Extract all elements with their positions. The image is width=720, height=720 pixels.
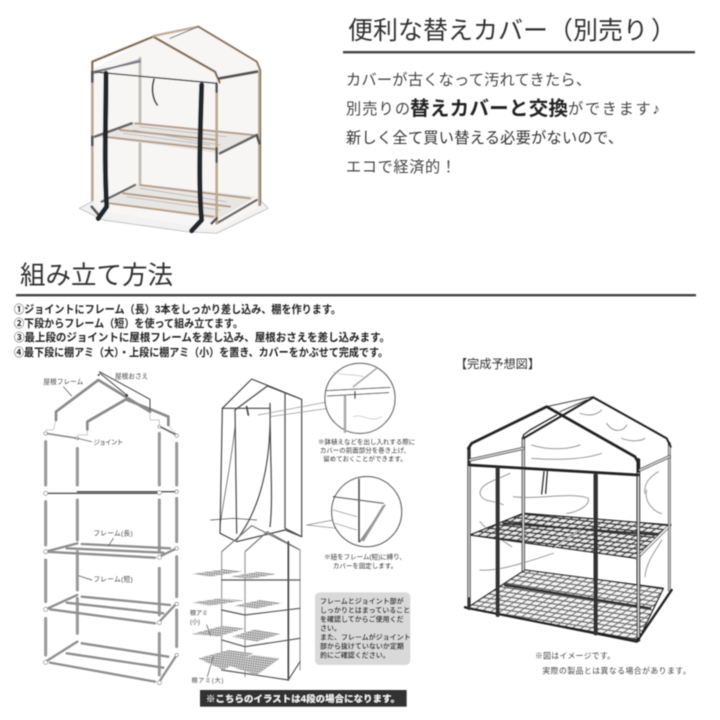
banner: four-tier note: ※こちらのイラストは4段の場合になります。	[206, 693, 400, 704]
rope	[542, 472, 547, 494]
front and side posts	[92, 70, 259, 223]
callout: check joints: さい。	[320, 623, 341, 632]
roof frame	[92, 37, 219, 82]
callout: check joints: 部から抜けていないか定期	[320, 641, 404, 650]
wrinkles in cover	[480, 410, 662, 577]
detail circle: tied cover	[332, 477, 402, 547]
note labels: ※鉢植えなどを出し入れする際に	[318, 437, 415, 446]
callout: check joints: 的にご確認ください。	[320, 650, 390, 659]
cover	[211, 379, 302, 542]
diagram: frame parts exploded view	[43, 372, 178, 685]
note labels	[318, 437, 415, 570]
text block: replacement cover description: 別売りの	[346, 101, 410, 118]
heading: assembly method: 組み立て方法	[20, 262, 173, 290]
heading: replacement cover: ）	[651, 17, 676, 45]
frame part labels	[43, 372, 149, 583]
frame part labels: ジョイント	[93, 440, 123, 447]
frame part labels: フレーム(長)	[93, 530, 133, 538]
door straps	[498, 468, 596, 633]
text block: assembly steps: ②下段からフレーム（短）を使って組み立てます。	[14, 316, 243, 330]
label: completed image heading: 【完成予想図】	[455, 356, 540, 371]
note labels: カバーを固定します。	[333, 562, 397, 570]
heading rule	[343, 51, 695, 53]
caption: 実際の製品とは異なる場合があります。	[542, 665, 691, 675]
roof	[468, 397, 671, 463]
text block: replacement cover description: 替えカバーと交換	[410, 97, 568, 120]
frame joints	[92, 72, 259, 223]
back and side posts	[469, 438, 669, 640]
text block: replacement cover description: エコで経済的！	[346, 159, 456, 176]
banner: four-tier note	[200, 690, 407, 707]
text block: replacement cover description: カバーが古くなって汚れてきたら、	[346, 72, 591, 89]
top cross bars	[92, 72, 217, 83]
text block: assembly steps: ①ジョイントにフレーム（長）3本をしっかり差し込み、棚を作ります。	[14, 302, 341, 316]
heading: replacement cover: 便利な替えカバー（別売り	[348, 17, 648, 45]
lower shelf	[467, 570, 663, 640]
diagram: completed greenhouse	[465, 397, 691, 675]
shelf nets	[192, 569, 282, 675]
lower shelf	[102, 183, 257, 223]
callout: check joints: フレームとジョイント部が	[320, 597, 404, 606]
text block: assembly steps: ③最上段のジョイントに屋根フレームを差し込み、屋根おさえを差し込みます。	[14, 330, 390, 344]
photo: greenhouse with clear cover	[79, 27, 268, 233]
callout: check joints: を確認してからご使用くだ	[320, 615, 404, 624]
detail circle: rolled-up cover	[325, 363, 395, 433]
note labels: カバーの前面部分を巻き上げ、	[320, 445, 410, 454]
diagram: cover and shelf nets	[190, 363, 415, 707]
callout: check joints: しっかりとはまっていること	[320, 606, 410, 615]
frame part labels: 屋根フレーム	[43, 377, 84, 386]
zoom lines	[258, 402, 337, 528]
cross bars	[469, 448, 669, 475]
text block: assembly steps	[14, 302, 390, 359]
back frame and cover panels	[135, 58, 144, 187]
rope loop	[152, 79, 157, 105]
floor sheet	[79, 200, 268, 233]
caption	[535, 651, 691, 675]
joints	[44, 425, 178, 685]
lower frame with shelves	[222, 526, 300, 680]
text block: assembly steps: ④最下段に棚アミ（大）・上段に棚アミ（小）を置き、カバーをかぶせて完成です。	[14, 345, 388, 359]
assembly heading rule	[16, 294, 696, 296]
frame part labels: 屋根おさえ	[115, 372, 149, 381]
black door straps	[98, 73, 107, 218]
upper shelf	[95, 123, 257, 153]
note labels: 留めておくことができます。	[323, 454, 407, 463]
shelf bars	[46, 433, 177, 682]
leader lines	[63, 387, 113, 580]
net labels	[190, 609, 223, 684]
note labels: ※紐をフレーム(短)に縛り、	[324, 552, 406, 561]
upper shelf	[470, 513, 670, 558]
net labels: 棚アミ(大)	[192, 676, 223, 684]
text block: replacement cover description	[346, 72, 660, 176]
callout: check joints	[315, 592, 411, 665]
text block: replacement cover description: 新しく全て買い替える必要がないので、	[346, 130, 623, 147]
caption: ※図はイメージです。	[535, 651, 615, 660]
vertical frame posts	[46, 433, 177, 675]
roof frames	[46, 372, 177, 435]
callout: check joints: また、フレームがジョイント	[320, 632, 411, 641]
frame part labels: フレーム(短)	[93, 574, 133, 583]
net labels: 棚アミ	[190, 609, 208, 617]
cover body	[92, 27, 260, 230]
text block: replacement cover description: ができます♪	[568, 101, 660, 118]
net labels: (小)	[190, 618, 200, 626]
bottom frame	[465, 590, 672, 642]
